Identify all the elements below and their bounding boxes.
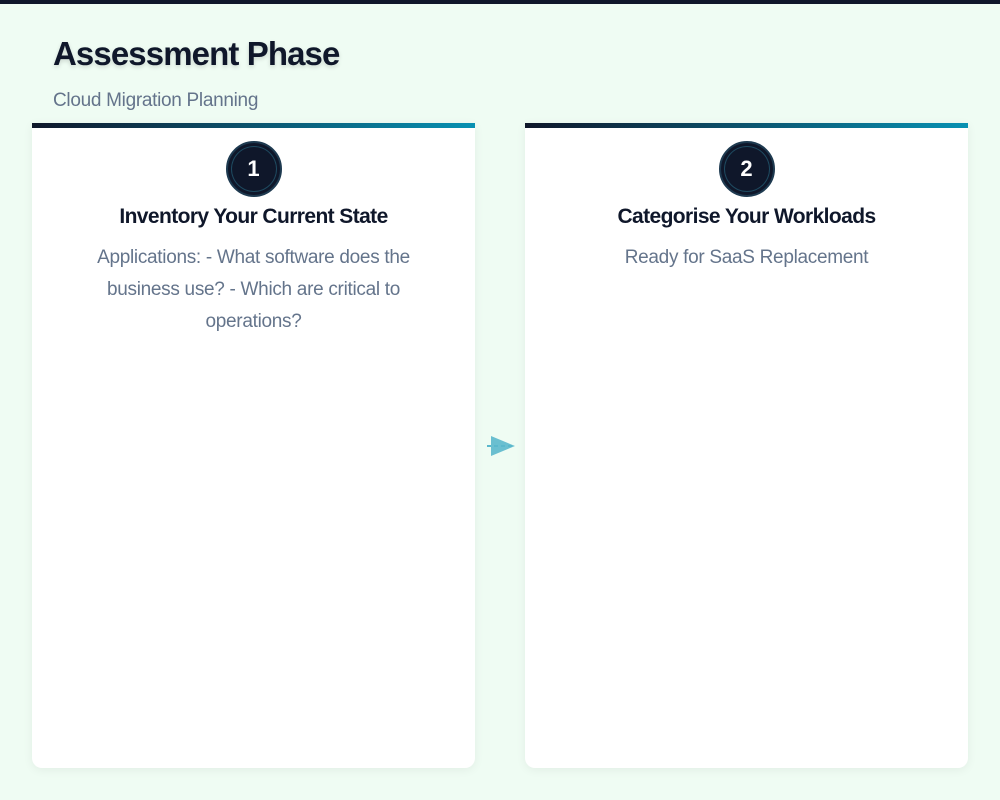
badge 1: 1 bbox=[247, 156, 260, 181]
text step 1: Applications: - What software does the business use? - Which are critical to operations? bbox=[97, 247, 410, 332]
panel: step 1 bbox=[32, 123, 475, 768]
arrow bbox=[487, 436, 515, 456]
badge 1 bbox=[226, 141, 282, 197]
heading step 2: Categorise Your Workloads bbox=[617, 205, 876, 228]
panel: step 2 bbox=[525, 123, 968, 768]
subtitle: Cloud Migration Planning bbox=[53, 90, 258, 111]
heading step 1: Inventory Your Current State bbox=[119, 205, 388, 228]
badge 2: 2 bbox=[740, 156, 753, 181]
title: Assessment Phase bbox=[53, 35, 339, 72]
badge 2 bbox=[718, 141, 774, 197]
text step 2: Ready for SaaS Replacement bbox=[625, 247, 868, 268]
